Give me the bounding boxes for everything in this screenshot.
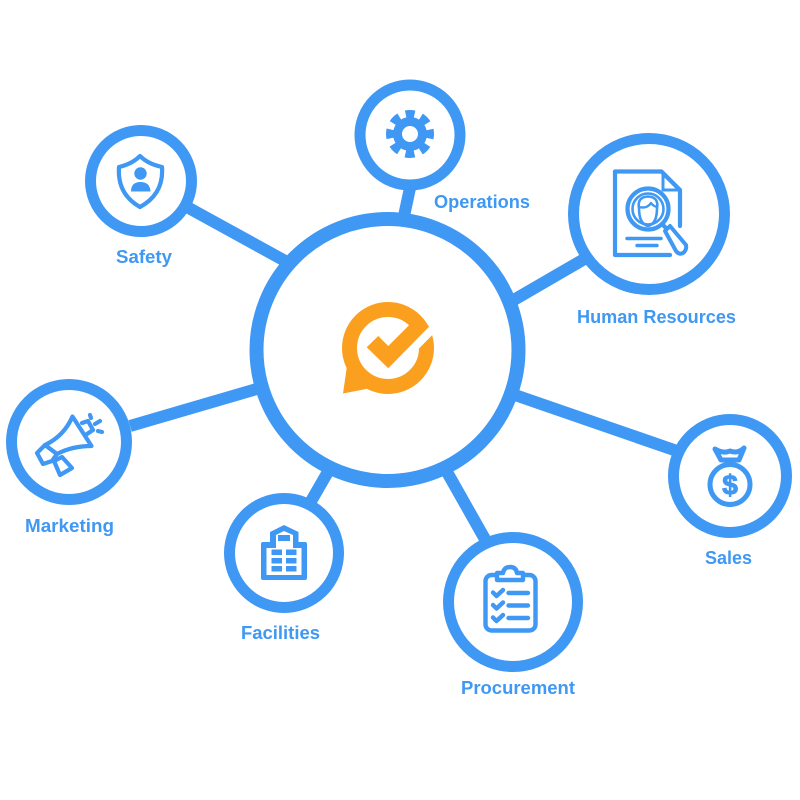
node: Procurement xyxy=(448,538,578,666)
icon: document with magnifier xyxy=(615,172,686,255)
icon: shield with person xyxy=(119,156,162,207)
node: Sales xyxy=(674,420,786,532)
node: Safety xyxy=(90,130,192,232)
icon: gear xyxy=(390,114,430,154)
node: Marketing xyxy=(12,384,126,500)
icon: clipboard checklist xyxy=(486,567,536,630)
icon: orange check logo xyxy=(343,310,442,394)
connector lines xyxy=(130,188,677,541)
label: Procurement: Procurement xyxy=(461,678,575,698)
icon: money bag: $ xyxy=(722,470,738,500)
node: Operations xyxy=(360,85,460,185)
central hub circle xyxy=(256,219,518,481)
icon: megaphone xyxy=(37,415,102,475)
icon: building xyxy=(261,525,307,580)
label: Sales: Sales xyxy=(705,548,752,568)
node: Facilities xyxy=(230,498,338,608)
label: Human Resources: Human Resources xyxy=(577,307,736,327)
label: Safety: Safety xyxy=(116,247,172,267)
label: Facilities: Facilities xyxy=(241,623,320,643)
label: Operations: Operations xyxy=(434,192,530,212)
node: Human Resources xyxy=(574,138,724,290)
label: Marketing: Marketing xyxy=(25,516,114,536)
